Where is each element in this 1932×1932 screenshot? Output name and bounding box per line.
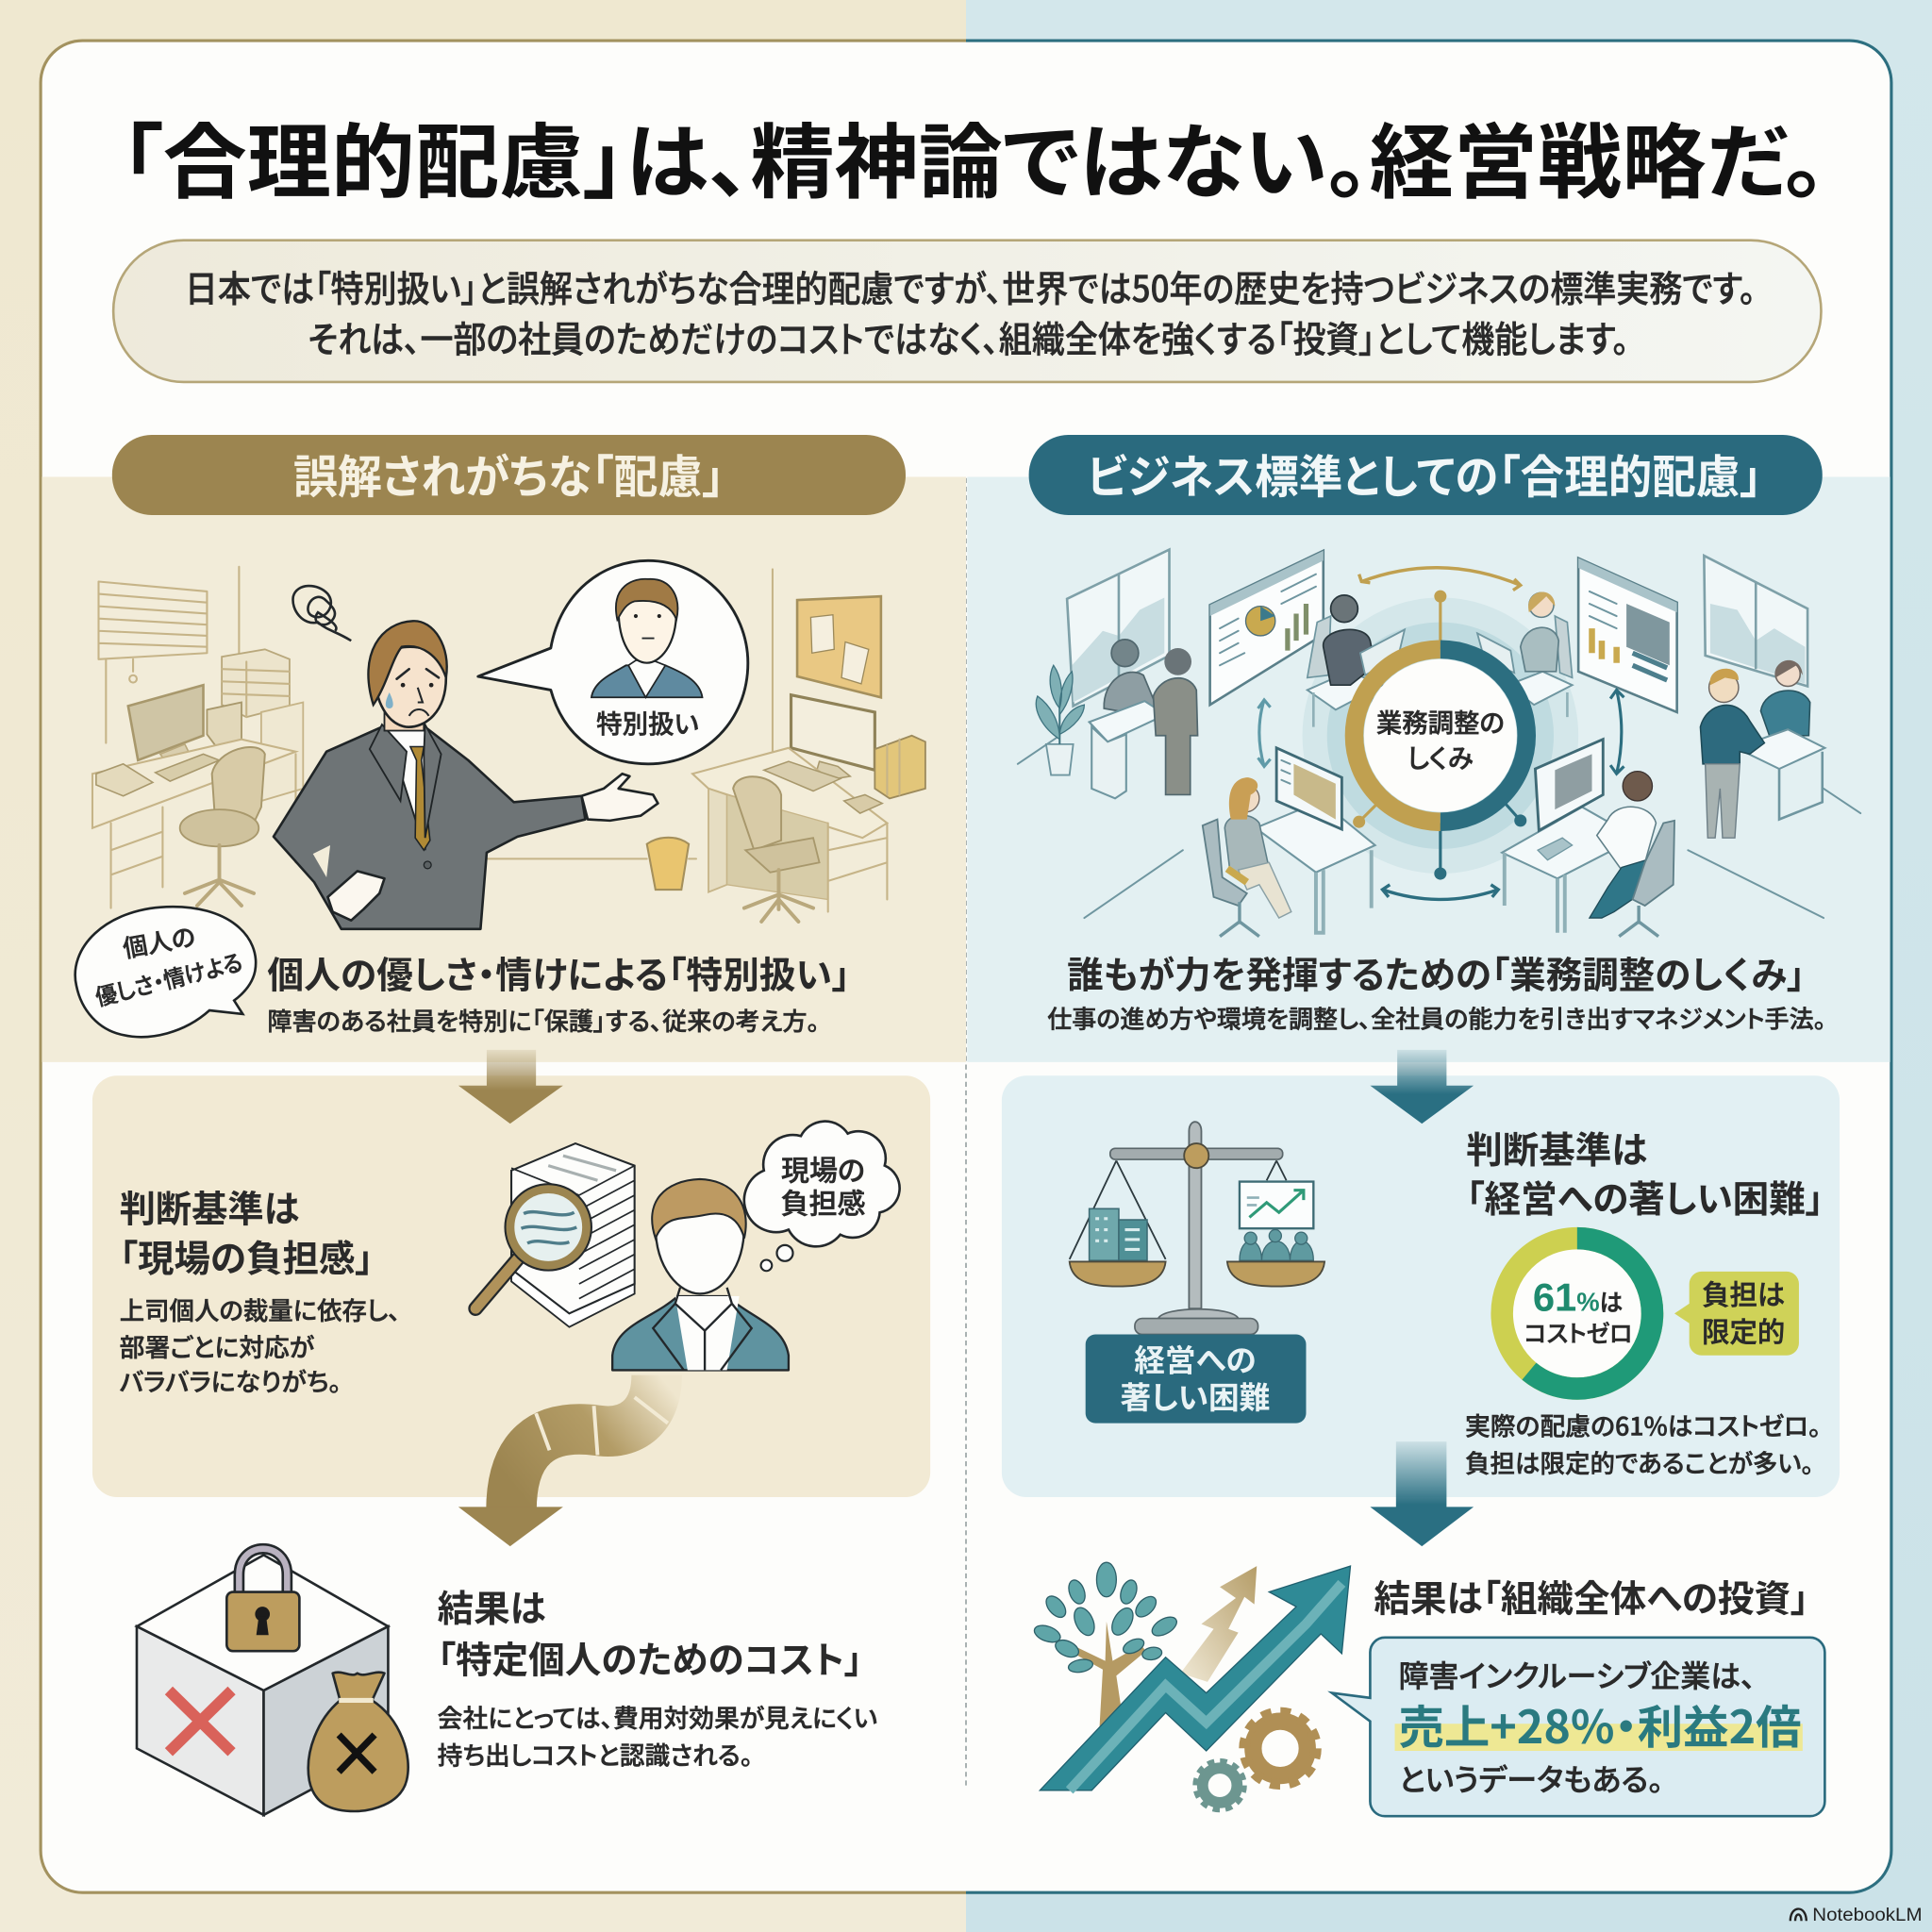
label box: management hardship: 著しい困難 xyxy=(1121,1374,1270,1418)
intro text pill: それは、一部の社員のためだけのコストではなく、組織全体を強くする「投資」として機能します。 xyxy=(308,311,1629,364)
heading: judgement criterion left: 判断基準は xyxy=(120,1181,299,1234)
icon: balance scale xyxy=(1070,1122,1324,1335)
arrow: left down 1 xyxy=(458,1050,563,1124)
text: result cost description xyxy=(438,1698,877,1772)
text: result cost description: 会社にとっては、費用対効果が見えにくい xyxy=(438,1698,877,1735)
callout: data box: 障害インクルーシブ企業は、 xyxy=(1398,1653,1756,1696)
callout: data box: というデータもある。 xyxy=(1398,1757,1663,1800)
text: conventional thinking: 障害のある社員を特別に「保護」する、従来の考え方。 xyxy=(267,1002,820,1038)
right top panel background xyxy=(967,476,1890,1062)
plant xyxy=(1046,744,1074,775)
donut chart: 61% cost zero xyxy=(1502,1239,1653,1389)
ring label: 業務調整の xyxy=(1376,702,1505,740)
heading: result investment: 結果は「組織全体への投資」 xyxy=(1374,1570,1808,1623)
intro text pill: 日本では「特別扱い」と誤解されがちな合理的配慮ですが、世界では50年の歴史を持つビジネスの標準実務です。 xyxy=(185,260,1756,313)
callout: data box: 売上+28%・利益2倍 xyxy=(1398,1690,1802,1757)
heading: result cost: 結果は xyxy=(438,1580,546,1633)
text: donut explanation: 負担は限定的であることが多い。 xyxy=(1465,1443,1814,1480)
left header pill: 誤解されがちな「配慮」 xyxy=(293,440,724,506)
windows xyxy=(1067,550,1170,706)
callout: data box xyxy=(1332,1638,1824,1816)
label box: management hardship xyxy=(1086,1335,1306,1424)
intro text pill xyxy=(113,241,1821,382)
speech bubble: special treatment: 特別扱い xyxy=(596,703,699,741)
speech bubble: special treatment xyxy=(478,560,748,764)
icon: growing tree xyxy=(1032,1562,1180,1735)
far-left pair xyxy=(1104,673,1156,715)
panel: right result (investment) xyxy=(1032,1562,1824,1816)
icon: dizzy swirl xyxy=(293,586,351,641)
speech bubble: personal kindness xyxy=(75,907,256,1037)
text: judgement description left: バラバラになりがち。 xyxy=(120,1362,341,1399)
left top panel background xyxy=(42,476,966,1062)
heading: judgement criterion left xyxy=(120,1181,374,1283)
panel: right judgement card xyxy=(1002,1075,1840,1497)
screens xyxy=(1210,551,1324,705)
arrow: right down 1 xyxy=(1370,1050,1474,1124)
heading: special treatment: 個人の優しさ・情けによる「特別扱い」 xyxy=(267,947,850,1000)
thought cloud: on-site burden xyxy=(744,1122,900,1271)
thought cloud: on-site burden: 現場の xyxy=(781,1147,865,1189)
tag: limited burden xyxy=(1674,1272,1799,1356)
top-right seated worker xyxy=(1555,616,1573,677)
text: work adjustment description: 仕事の進め方や環境を調整し、全社員の能力を引き出すマネジメント手法。 xyxy=(1047,999,1826,1035)
heading: result cost: 「特定個人のためのコスト」 xyxy=(438,1632,862,1685)
label box: management hardship: 経営への xyxy=(1134,1337,1257,1381)
icon: locked box with money bag xyxy=(137,1549,408,1815)
panel: right column (business standard) xyxy=(967,435,1923,1925)
text: judgement description left: 部署ごとに対応が xyxy=(120,1327,315,1364)
lower-left worker xyxy=(1256,801,1375,873)
ring xyxy=(1354,649,1441,822)
illustration: collaborative office: しくみ xyxy=(1407,738,1474,775)
speech bubble: personal kindness: 優しさ・情けよる xyxy=(92,943,245,1012)
arcs xyxy=(1361,568,1521,585)
icon: gears xyxy=(1196,1713,1316,1808)
heading: result cost xyxy=(438,1580,862,1685)
heading: judgement criterion right: 判断基準は xyxy=(1466,1122,1647,1174)
tag: limited burden: 限定的 xyxy=(1702,1310,1785,1350)
far-right pair xyxy=(1760,691,1810,736)
text: judgement description left xyxy=(120,1291,400,1399)
left header pill xyxy=(112,435,906,515)
watermark: NotebookLM: NotebookLM xyxy=(1812,1906,1923,1925)
panel: left judgement card xyxy=(92,1075,930,1497)
icon: document stack with magnifier xyxy=(475,1143,635,1327)
tag: limited burden: 負担は xyxy=(1702,1274,1785,1313)
top-left seated worker xyxy=(1307,616,1331,677)
text: result cost description: 持ち出しコストと認識される。 xyxy=(438,1735,753,1772)
text: donut explanation: 実際の配慮の61%はコストゼロ。 xyxy=(1465,1407,1821,1443)
column divider xyxy=(965,478,967,1787)
spokes xyxy=(1359,596,1441,822)
title: 「合理的配慮」は、精神論ではない。経営戦略だ。 xyxy=(121,96,1826,214)
arrow: right down 2 xyxy=(1370,1441,1474,1546)
heading: judgement criterion right: 「経営への著しい困難」 xyxy=(1466,1171,1824,1224)
heading: judgement criterion right xyxy=(1466,1122,1824,1224)
icon: tan secondary arrow xyxy=(1180,1566,1257,1682)
donut chart: 61% cost zero: コストゼロ xyxy=(1524,1315,1633,1349)
thought cloud: on-site burden: 負担感 xyxy=(780,1181,866,1223)
heading: work adjustment: 誰もが力を発揮するための「業務調整のしくみ」 xyxy=(1067,947,1805,1000)
speech bubble: personal kindness: 個人の xyxy=(120,917,198,965)
illustration: left office background xyxy=(92,567,925,922)
panel: left column (misunderstood accommodation) xyxy=(42,435,966,1546)
text: donut explanation xyxy=(1465,1407,1821,1480)
icon: worried businessman xyxy=(274,621,658,929)
text: judgement description left: 上司個人の裁量に依存し、 xyxy=(120,1291,400,1327)
donut chart: 61% cost zero: 61%は xyxy=(1533,1275,1623,1320)
icon: teal rising zigzag arrow xyxy=(1040,1566,1351,1790)
arrow: curved down arrow xyxy=(458,1375,668,1546)
heading: judgement criterion left: 「現場の負担感」 xyxy=(120,1230,374,1283)
icon: faceless manager xyxy=(612,1179,789,1370)
lower-right worker xyxy=(1502,808,1637,878)
right header pill: ビジネス標準としての「合理的配慮」 xyxy=(1087,440,1762,506)
illustration: collaborative office xyxy=(1018,550,1860,937)
panel: left result (cost) xyxy=(137,1549,877,1815)
